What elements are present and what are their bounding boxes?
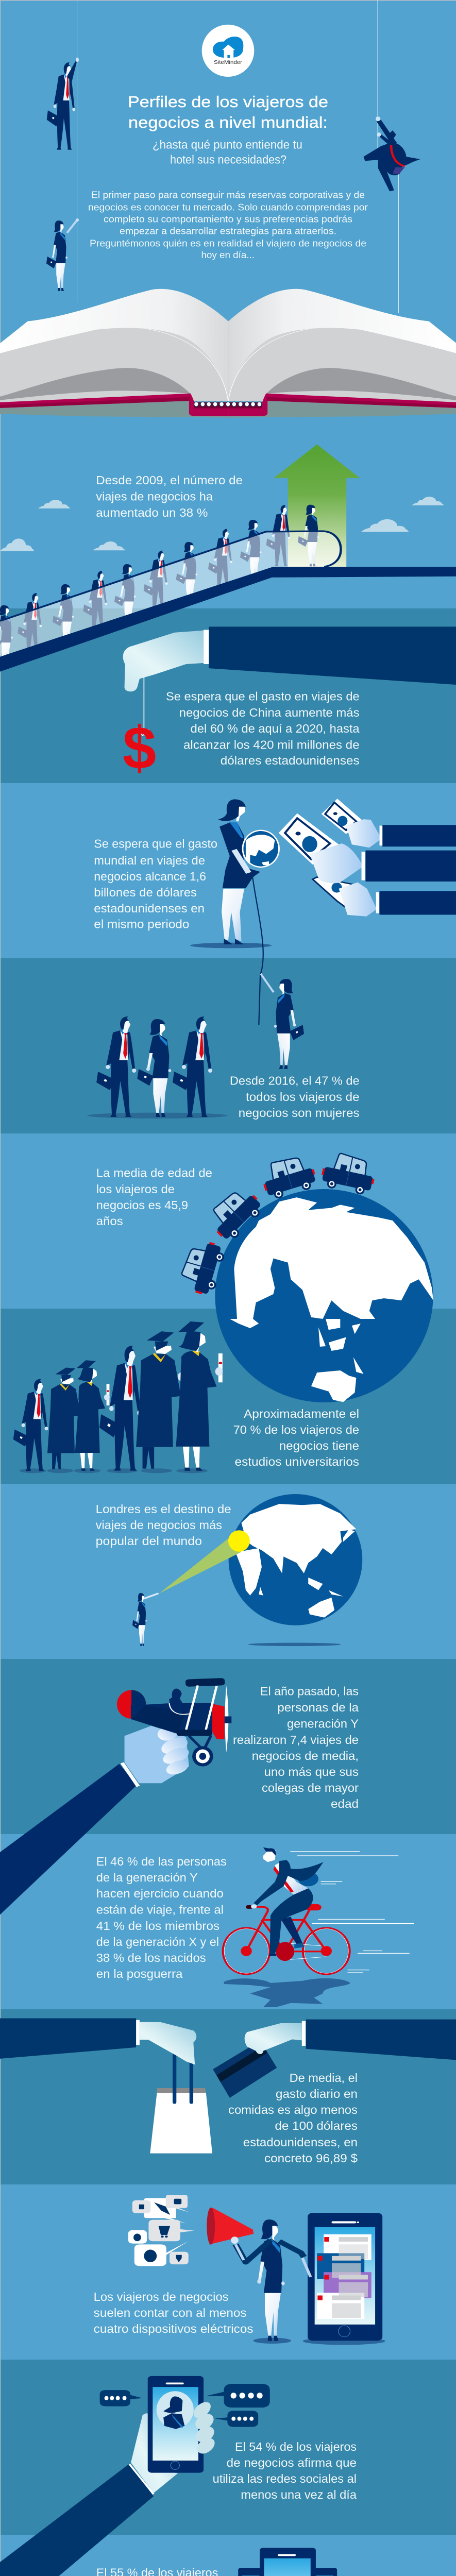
figure: man climbing rope bbox=[47, 58, 79, 150]
illustration: cyclist bbox=[223, 1848, 414, 2007]
intro text: empezar a desarrollar estrategias para atraerlos. bbox=[120, 226, 336, 236]
statistic text: de la generación Y bbox=[96, 1871, 198, 1884]
statistic text: 70 % de los viajeros de bbox=[233, 1423, 359, 1436]
statistic text: utiliza las redes sociales al bbox=[213, 2472, 357, 2485]
statistic text: negocios de China aumente más bbox=[179, 706, 360, 719]
statistic text: edad bbox=[331, 1797, 359, 1810]
panel: exercise bbox=[96, 1848, 414, 2007]
statistic text: El 54 % de los viajeros bbox=[235, 2440, 357, 2453]
subtitle: hotel sus necesidades? bbox=[170, 152, 286, 166]
statistic text: del 60 % de aquí a 2020, hasta bbox=[191, 722, 360, 735]
illustration: open book bbox=[0, 289, 456, 418]
statistic text: en la posguerra bbox=[96, 1967, 183, 1980]
statistic text: De media, el bbox=[290, 2071, 358, 2084]
statistic text: mundial en viajes de bbox=[94, 854, 205, 867]
statistic text: 38 % de los nacidos bbox=[96, 1951, 206, 1964]
statistic text: El 46 % de las personas bbox=[96, 1855, 227, 1868]
statistic text bbox=[228, 2071, 358, 2165]
statistic text: menos una vez al día bbox=[241, 2488, 357, 2501]
title bbox=[128, 93, 328, 131]
statistic text: los viajeros de bbox=[96, 1182, 175, 1196]
statistic text: La media de edad de bbox=[96, 1166, 212, 1180]
illustration: woman with megaphone and tablet bbox=[128, 2195, 385, 2345]
climbing ropes bbox=[77, 0, 399, 313]
subtitle: ¿hasta qué punto entiende tu bbox=[153, 138, 302, 151]
statistic text bbox=[94, 2290, 254, 2335]
statistic text: Los viajeros de negocios bbox=[94, 2290, 229, 2303]
panel: generation Y trips bbox=[0, 1678, 359, 1914]
figure: woman climbing rope bbox=[46, 218, 79, 291]
illustration: woman with globe and money hands bbox=[190, 799, 456, 1025]
illustration: cars on globe bbox=[178, 1150, 433, 1402]
statistic text: Se espera que el gasto en viajes de bbox=[166, 690, 360, 703]
figure: woman holding rope bbox=[261, 974, 304, 1069]
statistic text: Londres es el destino de bbox=[96, 1502, 231, 1516]
statistic text: alcanzar los 420 mil millones de bbox=[183, 738, 360, 751]
statistic text: suelen contar con al menos bbox=[94, 2306, 247, 2319]
subtitle bbox=[153, 138, 302, 166]
statistic text: de la generación X y el bbox=[96, 1935, 219, 1948]
statistic text: aumentado un 38 % bbox=[96, 506, 208, 519]
statistic text: realizaron 7,4 viajes de bbox=[233, 1733, 359, 1747]
escalator people bbox=[0, 505, 319, 667]
statistic text: Desde 2009, el número de bbox=[96, 473, 243, 487]
statistic text bbox=[96, 1502, 231, 1548]
illustration: group of travellers bbox=[87, 1016, 227, 1118]
intro text: Preguntémonos quién es en realidad el viajero de negocios de bbox=[90, 238, 366, 248]
statistic text: negocios es 45,9 bbox=[96, 1198, 188, 1212]
statistic text: de negocios afirma que bbox=[227, 2456, 357, 2469]
statistic text: gasto diario en bbox=[276, 2087, 358, 2100]
statistic text: personas de la bbox=[277, 1701, 359, 1714]
statistic text: negocios son mujeres bbox=[239, 1106, 360, 1120]
figure: woman with flashlight bbox=[132, 1593, 147, 1646]
clouds bbox=[0, 497, 444, 551]
statistic text: negocios tiene bbox=[279, 1439, 359, 1452]
panel: header bbox=[0, 0, 456, 418]
statistic text: billones de dólares bbox=[94, 886, 197, 899]
illustration: hand holding biplane bbox=[0, 1678, 231, 1914]
statistic text bbox=[96, 1166, 212, 1228]
panel: daily meals spending bbox=[0, 2019, 456, 2165]
statistic text: hacen ejercicio cuando bbox=[96, 1887, 224, 1900]
intro text: negocios es conocer tu mercado. Solo cuando comprendas por bbox=[88, 202, 368, 212]
intro text bbox=[88, 190, 368, 260]
green growth arrow bbox=[274, 444, 360, 567]
statistic text: están de viaje, frente al bbox=[96, 1903, 224, 1917]
statistic text: 41 % de los miembros bbox=[96, 1919, 219, 1933]
panel: 70 % university studies bbox=[13, 1321, 359, 1473]
statistic text: estadounidenses, en bbox=[243, 2136, 358, 2149]
statistic text: todos los viajeros de bbox=[246, 1090, 360, 1104]
statistic text: viajes de negocios ha bbox=[96, 489, 213, 503]
illustration: phones and red carpet bbox=[230, 2548, 345, 2576]
escalator bbox=[0, 531, 456, 672]
statistic text bbox=[213, 2440, 357, 2501]
statistic text: estadounidenses en bbox=[94, 902, 205, 915]
illustration: hand with dollar on string: $ bbox=[123, 714, 156, 782]
logo: SiteMinder: SiteMinder bbox=[214, 59, 243, 65]
illustration: hand with smartphone bbox=[0, 2376, 270, 2576]
panel: four devices bbox=[94, 2195, 385, 2345]
statistic text: viajes de negocios más bbox=[96, 1518, 222, 1532]
panel: London destination bbox=[96, 1494, 362, 1646]
panel: China spending bbox=[123, 626, 456, 782]
statistic text: concreto 96,89 $ bbox=[264, 2151, 358, 2165]
statistic text: cuatro dispositivos eléctricos bbox=[94, 2322, 254, 2335]
statistic text: estudios universitarios bbox=[235, 1455, 359, 1468]
illustration: hands with bag and card bbox=[0, 2019, 456, 2154]
panel: mobile apps bbox=[96, 2548, 345, 2576]
statistic text: Desde 2016, el 47 % de bbox=[230, 1074, 360, 1088]
title: Perfiles de los viajeros de bbox=[128, 93, 328, 111]
statistic text bbox=[94, 837, 217, 931]
statistic text: el mismo periodo bbox=[94, 918, 189, 931]
statistic text: Se espera que el gasto bbox=[94, 837, 217, 851]
title: negocios a nivel mundial: bbox=[128, 113, 328, 131]
statistic text: uno más que sus bbox=[264, 1765, 359, 1778]
statistic text: generación Y bbox=[287, 1717, 359, 1730]
statistic text: negocios de media, bbox=[252, 1749, 359, 1762]
statistic text bbox=[166, 690, 360, 767]
intro text: completo su comportamiento y sus preferencias podrás bbox=[104, 213, 352, 225]
illustration: hand with dollar on string bbox=[123, 626, 456, 782]
intro text: El primer paso para conseguir más reservas corporativas y de bbox=[91, 190, 365, 200]
statistic text bbox=[233, 1407, 359, 1468]
statistic text: colegas de mayor bbox=[262, 1781, 359, 1794]
statistic text: Aproximadamente el bbox=[244, 1407, 359, 1420]
panel: social networks bbox=[0, 2376, 357, 2576]
panel: 47 % women bbox=[87, 974, 360, 1120]
figure: man hanging from rope bbox=[364, 116, 420, 191]
statistic text: El año pasado, las bbox=[260, 1685, 359, 1698]
logo: SiteMinder bbox=[202, 25, 254, 77]
statistic text: negocios alcance 1,6 bbox=[94, 870, 206, 883]
statistic text bbox=[233, 1685, 359, 1810]
illustration: globe and spotlight bbox=[144, 1494, 362, 1646]
illustration: graduates bbox=[13, 1321, 223, 1473]
statistic text bbox=[96, 1855, 227, 1980]
panel: business trips up 38 % bbox=[0, 444, 456, 672]
statistic text: años bbox=[96, 1214, 123, 1228]
intro text: hoy en día... bbox=[201, 249, 255, 260]
statistic text bbox=[230, 1074, 360, 1120]
statistic text: de 100 dólares bbox=[275, 2119, 358, 2132]
statistic text: popular del mundo bbox=[96, 1534, 202, 1548]
statistic text: comidas es algo menos bbox=[228, 2103, 358, 2116]
panel: world spending bbox=[94, 799, 456, 1025]
statistic text bbox=[96, 473, 243, 519]
panel: average age 45.9 bbox=[96, 1150, 433, 1402]
statistic text: dólares estadounidenses bbox=[221, 754, 360, 767]
